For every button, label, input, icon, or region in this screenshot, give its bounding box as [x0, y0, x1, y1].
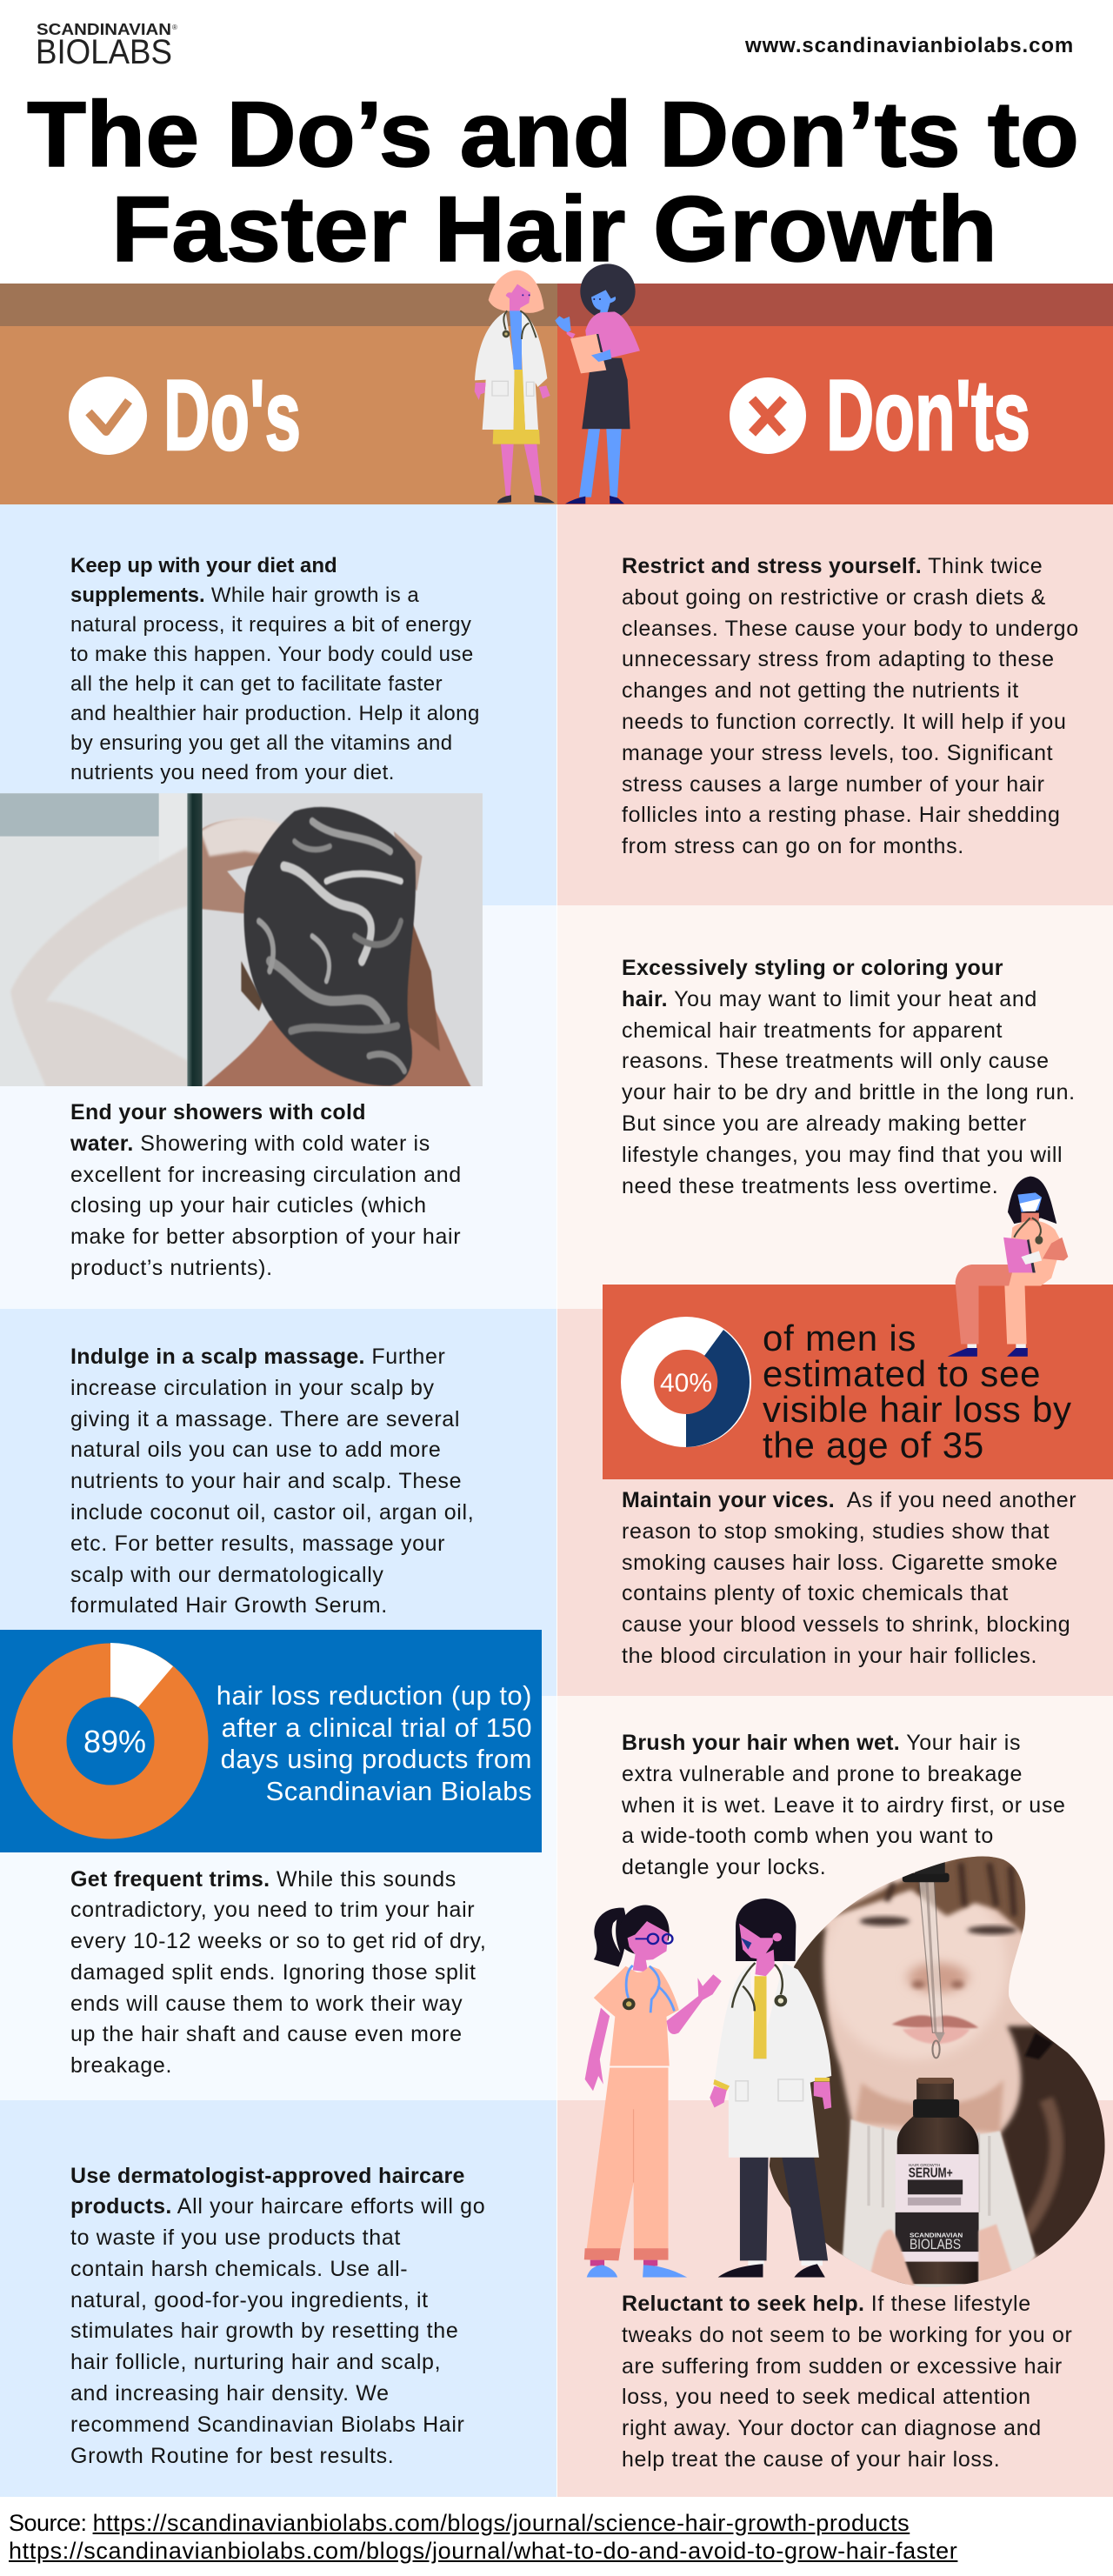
text: get frequent trims: breakage.: [70, 2053, 172, 2078]
text: keep up with your diet: all the help it can get to facilitate faster: [70, 672, 443, 696]
text: restrict and stress yourself: needs to function correctly. It will help if you: [622, 710, 1067, 734]
text: restrict and stress yourself: [622, 554, 1079, 858]
text: restrict and stress yourself: unnecessary stress from adapting to these: [622, 647, 1055, 671]
text: reluctant to seek help: right away. Your doctor can diagnose and: [622, 2416, 1042, 2440]
panel: don'ts header band: [557, 284, 1113, 504]
text: reluctant to seek help: Reluctant to seek help. If these lifestyle: [622, 2292, 1031, 2316]
text: reluctant to seek help: [622, 2292, 1072, 2472]
text: get frequent trims: Get frequent trims. While this sounds: [70, 1866, 457, 1891]
text: use dermatologist-approved products: and increasing hair density. We: [70, 2381, 390, 2406]
text: keep up with your diet: to make this happen. Your body could use: [70, 643, 474, 666]
text: excessively styling or coloring: reasons. These treatments will only cause: [622, 1049, 1050, 1073]
text: indulge in a scalp massage: scalp with our dermatologically: [70, 1563, 384, 1587]
text: restrict and stress yourself: from stress can go on for months.: [622, 834, 964, 858]
text: maintain your vices: the blood circulation in your hair follicles.: [622, 1644, 1037, 1668]
text: excessively styling or coloring: But since you are already making better: [622, 1111, 1027, 1136]
callout text: Scandinavian Biolabs: [266, 1776, 532, 1806]
text: keep up with your diet: [70, 553, 480, 784]
text: restrict and stress yourself: about going on restrictive or crash diets &: [622, 585, 1046, 610]
text: keep up with your diet: by ensuring you get all the vitamins and: [70, 731, 453, 755]
text: end your showers: closing up your hair cuticles (which: [70, 1193, 427, 1218]
text: maintain your vices: [622, 1488, 1076, 1668]
photo: man shampooing hair: [0, 793, 483, 1086]
title: The Do’s and Don’ts to: [27, 82, 1079, 186]
icon: check mark circle: [69, 377, 147, 455]
text: restrict and stress yourself: cleanses. These cause your body to undergo: [622, 617, 1079, 641]
text: excessively styling or coloring: hair. You may want to limit your heat and: [622, 987, 1037, 1011]
website url: www.scandinavianbiolabs.com: [745, 34, 1074, 57]
text: brush your hair when wet: Brush your hair when wet. Your hair is: [622, 1731, 1021, 1755]
text: reluctant to seek help: tweaks do not seem to be working for you or: [622, 2323, 1072, 2347]
callout text: after a clinical trial of 150: [222, 1712, 532, 1743]
title: [27, 82, 1079, 281]
text: end your showers: water. Showering with cold water is: [70, 1131, 430, 1156]
callout text: [763, 1318, 1072, 1465]
text: use dermatologist-approved products: hair follicle, nurturing hair and scalp,: [70, 2350, 441, 2374]
text: excessively styling or coloring: Excessively styling or coloring your: [622, 956, 1003, 980]
text: brush your hair when wet: detangle your locks.: [622, 1855, 826, 1879]
text: restrict and stress yourself: follicles into a resting phase. Hair shedding: [622, 803, 1061, 827]
heading: do's: Do's: [163, 360, 301, 471]
text: maintain your vices: reason to stop smoking, studies show that: [622, 1519, 1050, 1544]
text: get frequent trims: damaged split ends. Ignoring those split: [70, 1960, 477, 1985]
icon: cross circle: [730, 377, 806, 454]
text: brush your hair when wet: a wide-tooth comb when you want to: [622, 1824, 994, 1848]
text: excessively styling or coloring: need these treatments less overtime.: [622, 1174, 998, 1198]
text: get frequent trims: every 10-12 weeks or so to get rid of dry,: [70, 1929, 486, 1953]
text: keep up with your diet: natural process, it requires a bit of energy: [70, 613, 471, 637]
footer: sources: [9, 2510, 958, 2564]
text: indulge in a scalp massage: Indulge in a scalp massage. Further: [70, 1345, 446, 1369]
text: end your showers: product’s nutrients).: [70, 1256, 273, 1280]
panel: don'ts column backgrounds: [557, 504, 1113, 2497]
logo: SCANDINAVIAN: [37, 21, 171, 38]
text: maintain your vices: Maintain your vices. As if you need another: [622, 1488, 1076, 1512]
text: use dermatologist-approved products: to waste if you use products that: [70, 2226, 401, 2250]
text: end your showers: End your showers with cold: [70, 1100, 366, 1124]
text: indulge in a scalp massage: include coconut oil, castor oil, argan oil,: [70, 1500, 474, 1525]
text: reluctant to seek help: help treat the cause of your hair loss.: [622, 2447, 1000, 2472]
callout text: visible hair loss by: [763, 1389, 1072, 1430]
callout text: hair loss reduction (up to): [217, 1680, 532, 1711]
text: keep up with your diet: and healthier hair production. Help it along: [70, 702, 480, 725]
illustration: seated nurse with clipboard: [948, 1176, 1068, 1357]
text: excessively styling or coloring: your hair to be dry and brittle in the long run.: [622, 1080, 1076, 1104]
text: restrict and stress yourself: manage your stress levels, too. Significant: [622, 741, 1053, 765]
text: indulge in a scalp massage: etc. For better results, massage your: [70, 1532, 445, 1556]
text: brush your hair when wet: [622, 1731, 1066, 1879]
text: use dermatologist-approved products: Growth Routine for best results.: [70, 2444, 394, 2468]
panel: 40% of men callout: [603, 1285, 1113, 1479]
text: brush your hair when wet: extra vulnerable and prone to breakage: [622, 1762, 1023, 1786]
text: get frequent trims: ends will cause them to work their way: [70, 1992, 463, 2016]
footer: sources: Source: https://scandinavianbiolabs.com/blogs/journal/science-hair-growth-products: [9, 2510, 910, 2536]
text: indulge in a scalp massage: nutrients to your hair and scalp. These: [70, 1469, 462, 1493]
text: end your showers: [70, 1100, 462, 1280]
text: restrict and stress yourself: changes and not getting the nutrients it: [622, 678, 1019, 703]
text: use dermatologist-approved products: Use dermatologist-approved haircare: [70, 2164, 465, 2188]
text: use dermatologist-approved products: contain harsh chemicals. Use all-: [70, 2257, 408, 2281]
text: reluctant to seek help: are suffering from sudden or excessive hair: [622, 2354, 1063, 2379]
callout text: [217, 1680, 532, 1806]
text: get frequent trims: [70, 1866, 486, 2078]
text: restrict and stress yourself: Restrict and stress yourself. Think twice: [622, 554, 1043, 578]
text: excessively styling or coloring: lifestyle changes, you may find that you will: [622, 1143, 1063, 1167]
text: get frequent trims: up the hair shaft and cause even more: [70, 2022, 463, 2046]
text: use dermatologist-approved products: [70, 2164, 485, 2468]
text: indulge in a scalp massage: formulated Hair Growth Serum.: [70, 1593, 388, 1618]
logo: BIOLABS: [36, 33, 172, 71]
text: end your showers: make for better absorption of your hair: [70, 1225, 461, 1249]
title: Faster Hair Growth: [111, 177, 997, 281]
text: maintain your vices: smoking causes hair loss. Cigarette smoke: [622, 1551, 1058, 1575]
text: indulge in a scalp massage: increase circulation in your scalp by: [70, 1376, 435, 1400]
text: maintain your vices: contains plenty of toxic chemicals that: [622, 1581, 1009, 1605]
text: indulge in a scalp massage: natural oils you can use to add more: [70, 1438, 441, 1462]
chart: 40% donut: 40%: [660, 1369, 712, 1398]
text: excessively styling or coloring: [622, 956, 1076, 1198]
callout text: days using products from: [221, 1744, 532, 1774]
photo: woman with serum bottle in blob shape: [769, 1856, 1105, 2287]
photo: woman with serum bottle in blob shape: HAIR GROWTH: [909, 2163, 941, 2168]
text: indulge in a scalp massage: [70, 1345, 474, 1618]
panel: 89% hair loss reduction callout: [0, 1630, 542, 1852]
chart: 89% donut: [12, 1643, 209, 1839]
text: keep up with your diet: supplements. While hair growth is a: [70, 584, 419, 607]
text: indulge in a scalp massage: giving it a massage. There are several: [70, 1407, 460, 1431]
text: keep up with your diet: Keep up with your diet and: [70, 553, 337, 577]
chart: 89% donut: 89%: [83, 1724, 146, 1759]
callout text: estimated to see: [763, 1353, 1041, 1394]
illustration: two doctors in header: [475, 264, 640, 504]
text: get frequent trims: contradictory, you need to trim your hair: [70, 1898, 475, 1922]
text: excessively styling or coloring: chemical hair treatments for apparent: [622, 1018, 1003, 1043]
text: use dermatologist-approved products: products. All your haircare efforts will go: [70, 2194, 485, 2219]
text: end your showers: excellent for increasing circulation and: [70, 1163, 462, 1187]
text: use dermatologist-approved products: natural, good-for-you ingredients, it: [70, 2288, 429, 2312]
photo: woman with serum bottle in blob shape: BIOLABS: [910, 2236, 961, 2252]
photo: woman with serum bottle in blob shape: SCANDINAVIAN: [910, 2232, 963, 2239]
text: maintain your vices: cause your blood vessels to shrink, blocking: [622, 1612, 1070, 1637]
footer: sources: https://scandinavianbiolabs.com/blogs/journal/what-to-do-and-avoid-to-grow-hair-faster: [9, 2538, 957, 2564]
text: keep up with your diet: nutrients you need from your diet.: [70, 761, 395, 784]
panel: do's header band: [0, 284, 557, 504]
panel: do's column backgrounds: [0, 504, 556, 2497]
callout text: the age of 35: [763, 1425, 984, 1465]
text: brush your hair when wet: when it is wet. Leave it to airdry first, or use: [622, 1793, 1066, 1818]
text: restrict and stress yourself: stress causes a large number of your hair: [622, 772, 1045, 797]
logo: ®: [172, 23, 177, 31]
text: use dermatologist-approved products: recommend Scandinavian Biolabs Hair: [70, 2412, 465, 2437]
text: reluctant to seek help: loss, you need to seek medical attention: [622, 2385, 1031, 2409]
photo: woman with serum bottle in blob shape: SERUM+: [909, 2166, 953, 2181]
text: use dermatologist-approved products: stimulates hair growth by resetting the: [70, 2319, 458, 2343]
callout text: of men is: [763, 1318, 916, 1358]
chart: 40% donut: [621, 1317, 751, 1447]
